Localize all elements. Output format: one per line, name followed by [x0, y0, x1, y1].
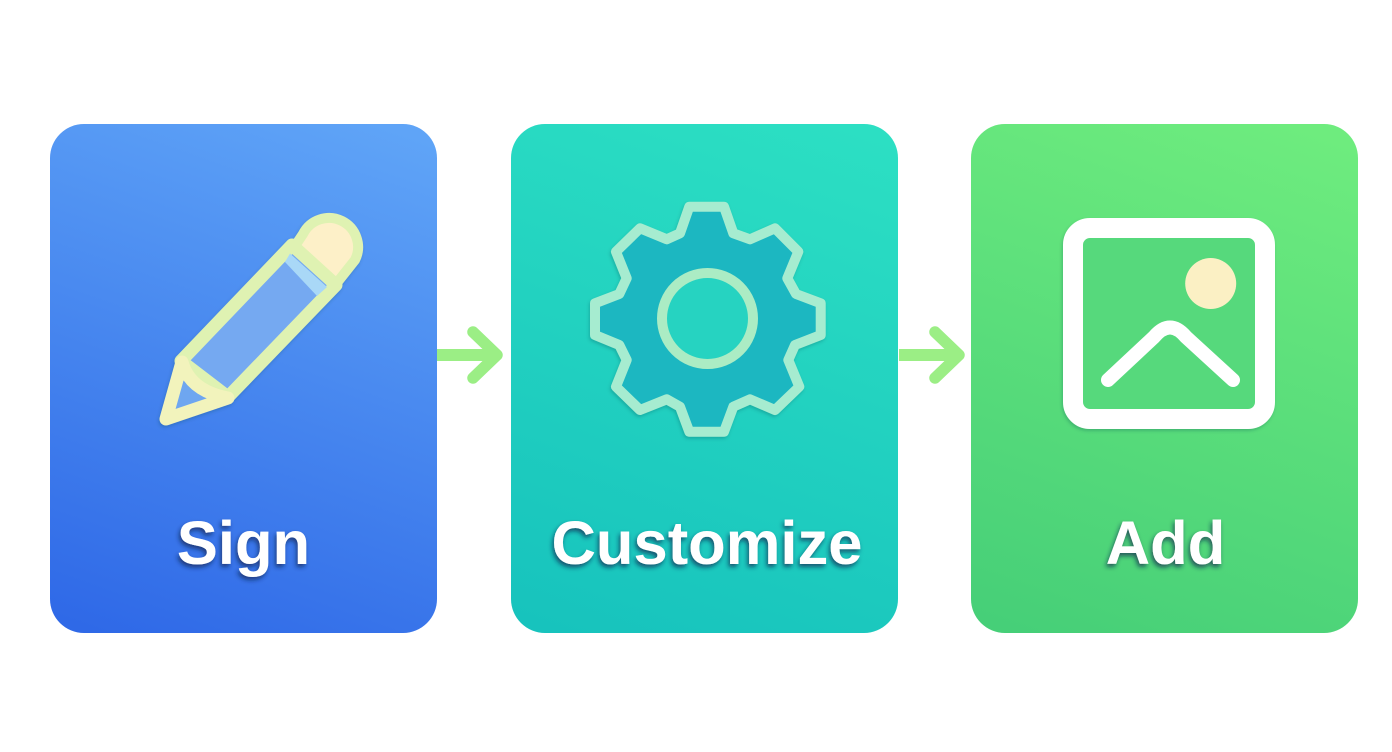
card background: Add: [971, 124, 1358, 633]
icon: pencil: [166, 218, 358, 419]
pencil ferrule band: [285, 254, 327, 296]
arrow: Sign to Customize: [437, 332, 497, 378]
label: Add: Add: [1106, 509, 1225, 578]
gear centre ring: [662, 273, 753, 364]
image frame: [1073, 228, 1265, 419]
panel: Customize: [511, 124, 898, 633]
panel: Add: [971, 124, 1358, 633]
label: Sign: Sign: [177, 509, 310, 578]
panel: Sign: [50, 124, 437, 633]
pencil body: [181, 245, 336, 397]
image sun: [1185, 258, 1236, 309]
card background: Sign: [50, 124, 437, 633]
icon: gear: [595, 207, 821, 432]
card background: Customize: [511, 124, 898, 633]
icon: image: [1073, 228, 1265, 419]
pencil tip: [166, 362, 228, 419]
arrow: Customize to Add: [899, 332, 959, 378]
gear outline: [595, 207, 821, 432]
image mountain: [1108, 328, 1233, 380]
pencil eraser cap: [295, 218, 358, 284]
label: Customize: Customize: [552, 509, 862, 578]
